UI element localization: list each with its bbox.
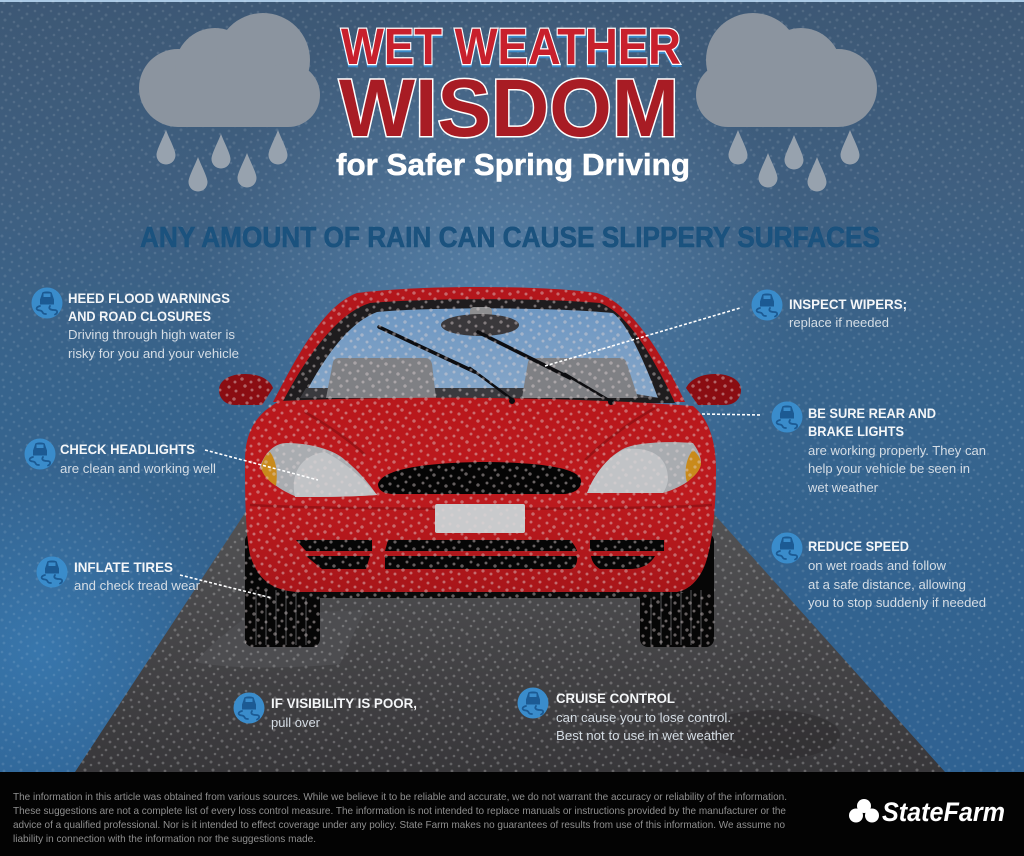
tip: flood warnings: AND ROAD CLOSURES [68, 308, 211, 324]
disclaimer [13, 791, 787, 845]
windshield frame [282, 299, 675, 403]
tip: flood warnings: HEED FLOOD WARNINGS [68, 290, 230, 306]
tip: cruise control: Best not to use in wet weather [556, 728, 735, 743]
car body [245, 398, 716, 592]
tip: reduce speed [772, 532, 986, 610]
tip: flood warnings: Driving through high water is [68, 327, 236, 342]
tip: headlights: CHECK HEADLIGHTS [60, 441, 195, 457]
title: WISDOM [339, 63, 679, 154]
disclaimer: These suggestions are not a complete list of every loss control measure. The information is not intended to replace manuals or instructions provided by the manufacturer or the [13, 805, 786, 817]
tip: cruise control [518, 688, 735, 743]
side mirrors [219, 374, 741, 405]
rear view mirror [441, 307, 519, 336]
subheading: ANY AMOUNT OF RAIN CAN CAUSE SLIPPERY SURFACES [140, 222, 880, 254]
callout lines [180, 308, 762, 598]
tip: reduce speed: REDUCE SPEED [808, 538, 909, 554]
tip: cruise control: CRUISE CONTROL [556, 690, 675, 706]
tip: brake lights [772, 402, 986, 495]
tip: brake lights: wet weather [807, 480, 879, 495]
lower vents [296, 540, 664, 569]
tip: cruise control: can cause you to lose control. [556, 710, 731, 725]
title [336, 18, 690, 182]
tip: visibility: IF VISIBILITY IS POOR, [271, 695, 417, 711]
tip: headlights [24, 438, 216, 476]
tip: tires: INFLATE TIRES [74, 559, 173, 575]
tip: flood warnings [32, 288, 239, 361]
tip: reduce speed: you to stop suddenly if needed [808, 595, 986, 610]
title: WET WEATHER [341, 18, 681, 75]
tip: reduce speed: on wet roads and follow [808, 558, 947, 573]
icon: left rain cloud [139, 13, 320, 192]
logo: State Farm: StateFarm [882, 797, 1005, 827]
tip: brake lights: are working properly. They can [808, 443, 986, 458]
left headlight [260, 443, 377, 497]
title: for Safer Spring Driving [336, 147, 690, 182]
car [219, 287, 741, 647]
hood creases [250, 408, 712, 509]
disclaimer: The information in this article was obtained from various sources. While we believe it to be reliable and accurate, we do not warrant the accuracy or reliability of the information. [13, 791, 787, 803]
tip: visibility: pull over [271, 715, 321, 730]
grille [378, 462, 581, 494]
tip: flood warnings: risky for you and your vehicle [68, 346, 239, 361]
disclaimer: liability in connection with the information nor the suggestions made. [13, 833, 316, 845]
disclaimer: advice of a qualified professional. Nor is it intended to effect coverage under any policy. State Farm makes no guarantees of results from use of this information. We assume no [13, 819, 785, 831]
icon: right rain cloud [696, 13, 877, 192]
footer band [0, 772, 1024, 856]
tip: wipers: replace if needed [789, 315, 889, 330]
tip: tires [36, 556, 201, 593]
tip: wipers [752, 290, 907, 330]
license plate [435, 504, 525, 533]
tip: tires: and check tread wear [74, 578, 201, 593]
puddle [195, 610, 365, 668]
tip: brake lights: help your vehicle be seen in [808, 461, 970, 476]
tip: brake lights: BE SURE REAR AND [808, 405, 936, 421]
title: WET WEATHER [341, 20, 681, 77]
wipers [379, 327, 614, 404]
tip: headlights: are clean and working well [60, 461, 216, 476]
tip: reduce speed: at a safe distance, allowing [808, 577, 966, 592]
tip: visibility [234, 692, 417, 730]
tip: brake lights: BRAKE LIGHTS [808, 423, 904, 439]
tires [245, 533, 714, 647]
tip: wipers: INSPECT WIPERS; [789, 296, 907, 312]
right headlight [587, 442, 701, 493]
road [75, 513, 945, 772]
cabin roof [273, 287, 685, 402]
seats and dash [300, 358, 660, 398]
windshield glass [303, 308, 658, 398]
